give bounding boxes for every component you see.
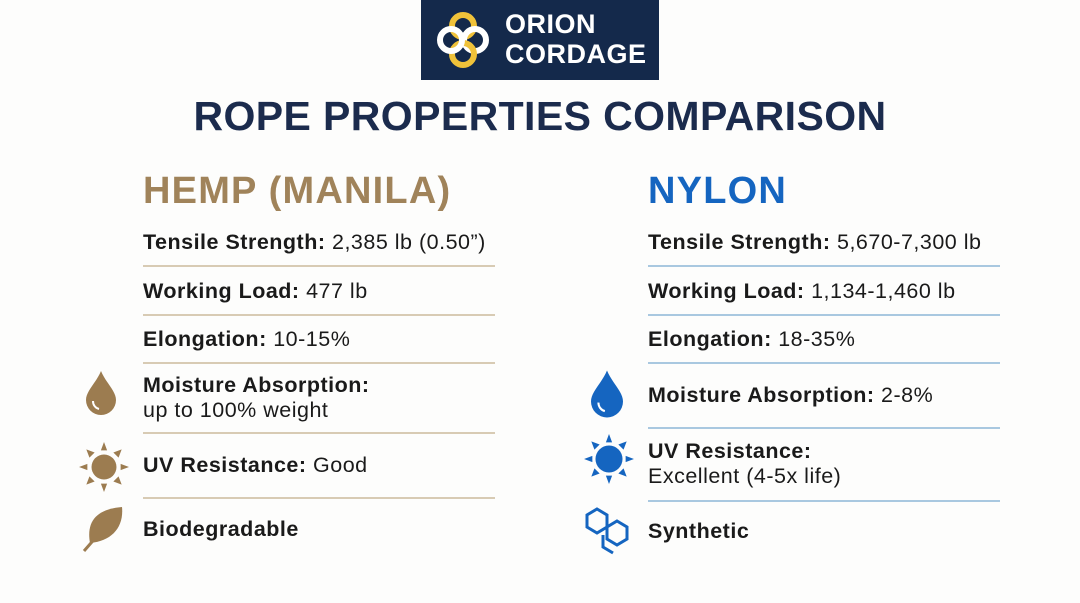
panel: hemp: Tensile Strength: 2,385 lb (0.50”) <box>143 230 486 254</box>
icon: sun <box>584 434 634 484</box>
panel: hemp: up to 100% weight <box>143 398 328 422</box>
panel: nylon: Excellent (4-5x life) <box>648 464 841 488</box>
heading: hemp: HEMP (MANILA) <box>143 170 451 212</box>
logo text: ORION <box>505 9 596 39</box>
panel: nylon <box>584 170 981 554</box>
panel: hemp: Elongation: 10-15% <box>143 327 350 351</box>
icon: rope knot <box>437 12 489 68</box>
panel: hemp <box>79 170 486 552</box>
panel: nylon: Moisture Absorption: 2-8% <box>648 383 933 407</box>
icon: leaf <box>83 507 122 552</box>
panel: hemp: Biodegradable <box>143 517 299 541</box>
panel: nylon: UV Resistance: <box>648 439 812 463</box>
panel: nylon: Elongation: 18-35% <box>648 327 855 351</box>
logo text: CORDAGE <box>505 39 647 69</box>
icon: drop <box>591 370 623 418</box>
logo <box>421 0 659 80</box>
panel: nylon: Tensile Strength: 5,670-7,300 lb <box>648 230 981 254</box>
panel: hemp: UV Resistance: Good <box>143 453 368 477</box>
logo text <box>505 9 647 69</box>
panel: hemp: Working Load: 477 lb <box>143 279 368 303</box>
panel: nylon: Working Load: 1,134-1,460 lb <box>648 279 956 303</box>
panel: nylon: Synthetic <box>648 519 749 543</box>
icon: molecule <box>586 507 628 554</box>
heading: nylon: NYLON <box>648 170 787 212</box>
title: ROPE PROPERTIES COMPARISON <box>193 93 887 139</box>
panel: hemp: Moisture Absorption: <box>143 373 370 397</box>
icon: drop <box>86 371 116 415</box>
icon: sun <box>79 442 129 492</box>
